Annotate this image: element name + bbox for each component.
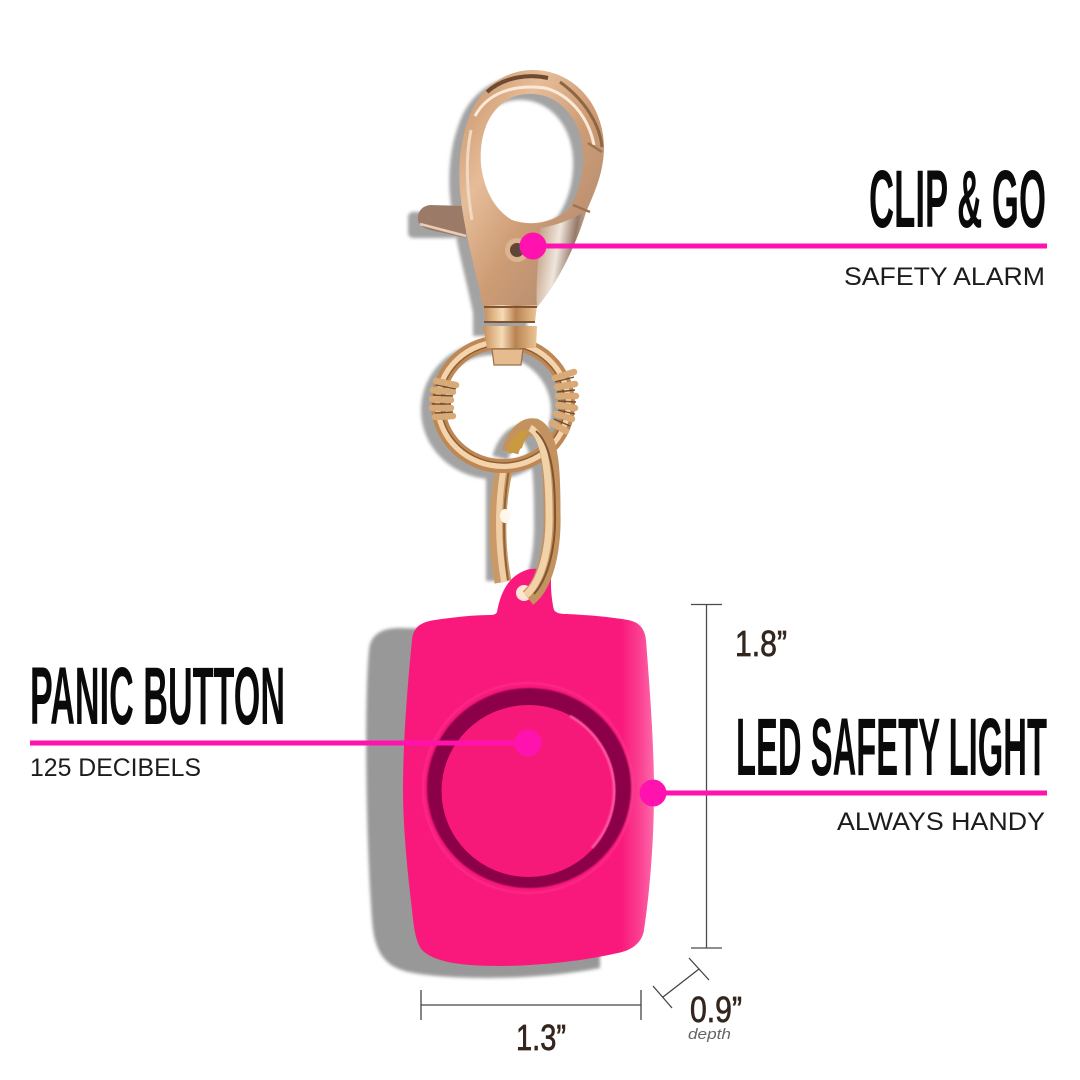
callout: clip and go [520,154,1047,291]
depth dimension: 0.9” [690,989,742,1030]
button recess ring [423,683,633,893]
callout: panic button: 125 DECIBELS [30,754,201,782]
icon: back of split ring [498,466,510,582]
height dimension: 1.8” [735,623,787,664]
icon: front of split ring [507,427,555,598]
callout: clip and go: SAFETY ALARM [844,263,1045,291]
icon: clip and rings shadow [408,76,594,604]
depth dimension: depth [688,1026,731,1043]
icon: pink alarm body [403,568,654,966]
callout: LED safety light [640,702,1047,836]
depth dimension [653,958,742,1043]
icon: swivel ring [432,342,576,466]
icon: lobster clasp lever [418,205,466,238]
icon: device shadow [366,628,600,978]
icon: key ring hole [516,585,532,601]
icon: lobster clasp [459,70,604,365]
callout: panic button: PANIC BUTTON [30,651,285,742]
height dimension [691,604,787,948]
callout: LED safety light: ALWAYS HANDY [837,808,1045,836]
width dimension [421,990,641,1058]
callout: panic button [30,651,542,782]
width dimension: 1.3” [516,1017,566,1058]
